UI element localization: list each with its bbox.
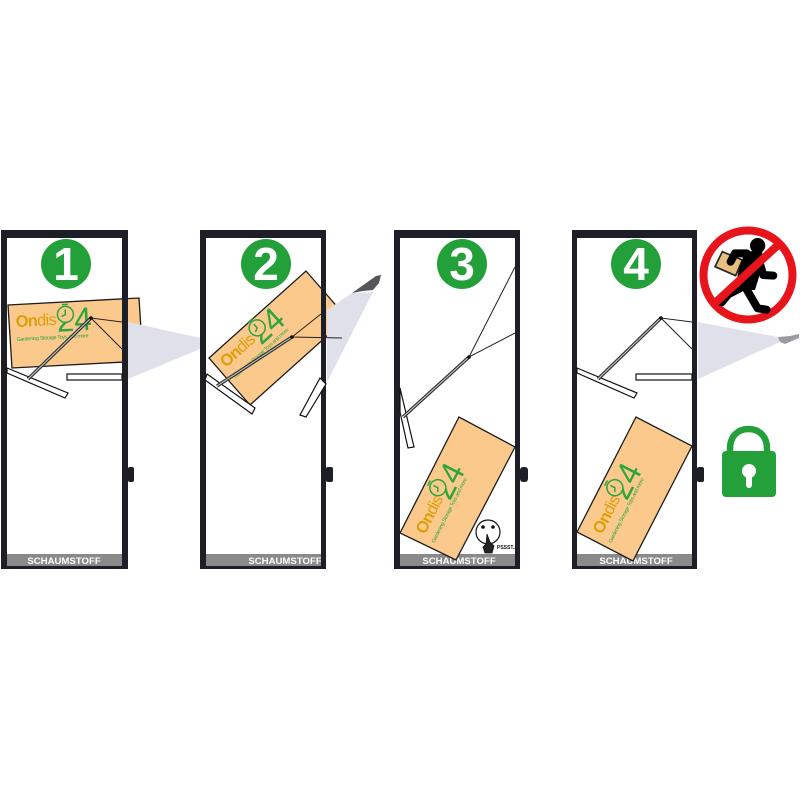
number badge 3 <box>437 238 487 290</box>
parcel 3: Gardening Storage Toys and more <box>431 477 469 544</box>
flap left 3 <box>400 388 414 448</box>
frame 1 <box>1 230 128 569</box>
arm 2 <box>217 314 342 386</box>
number badge 3: 3 <box>449 238 475 290</box>
icon: no parcel theft sign <box>704 230 792 320</box>
icon: shushing face: PSSST... <box>497 545 518 551</box>
shelf 1 <box>128 322 200 379</box>
frame knob 3 <box>520 467 528 482</box>
frame knob 2 <box>326 467 333 482</box>
flap right 1 <box>67 374 122 380</box>
flap left 1 <box>7 368 68 398</box>
flap right 4 <box>636 374 692 380</box>
foam strip 4: SCHAUMSTOFF <box>599 556 673 567</box>
parcel 2: Gardening Storage Toys and more <box>233 327 290 380</box>
frame 2 <box>200 230 326 569</box>
arm 1 <box>28 316 122 379</box>
number badge 4 <box>611 238 661 290</box>
number badge 2: 2 <box>253 238 279 290</box>
parcel 3: 24 <box>423 457 472 505</box>
parcel 1 <box>8 298 143 368</box>
arm 4 <box>598 316 692 379</box>
parcel 4 <box>577 417 692 561</box>
number badge 2 <box>241 238 291 290</box>
number badge 1: 1 <box>53 238 79 290</box>
frame knob 1 <box>128 467 134 482</box>
parcel 1: 24 <box>56 300 93 339</box>
icon: shushing face <box>476 520 518 553</box>
parcel 2 <box>209 271 347 405</box>
frame 3 <box>394 230 520 569</box>
parcel 4: 24 <box>600 457 649 505</box>
icon: padlock <box>722 429 776 497</box>
parcel 1: Gardening Storage Toys and more <box>17 333 89 343</box>
number badge 4: 4 <box>623 238 649 290</box>
foam strip 2 <box>206 554 322 567</box>
parcel 3: Ondis <box>413 492 447 537</box>
shelf 2 <box>327 275 381 382</box>
foam strip 1: SCHAUMSTOFF <box>27 556 101 567</box>
panel: step 2 <box>200 230 381 569</box>
flap left 2 <box>205 374 255 414</box>
number badge 1 <box>41 238 91 290</box>
panel: step 3 <box>394 230 528 569</box>
parcel 4: Gardening Storage Toys and more <box>608 477 646 544</box>
foam strip 1 <box>7 554 122 567</box>
parcel 3 <box>400 417 515 560</box>
parcel 4: Ondis <box>590 492 624 537</box>
foam strip 3: SCHAUMSTOFF <box>422 556 496 567</box>
arm 3 <box>403 267 515 417</box>
panel: step 4 <box>572 230 799 569</box>
flap left 4 <box>577 368 637 398</box>
frame 4 <box>572 230 697 569</box>
parcel 2: Ondis <box>217 330 259 371</box>
foam strip 4 <box>577 554 692 567</box>
frame knob 4 <box>697 467 704 482</box>
parcel 2: 24 <box>241 300 292 351</box>
foam strip 2: SCHAUMSTOFF <box>248 556 322 567</box>
foam strip 3 <box>400 554 515 567</box>
panel: step 1 <box>1 230 200 569</box>
parcel 1: Ondis <box>15 311 57 331</box>
flap right 2 <box>300 378 326 417</box>
shelf 4 <box>698 322 799 379</box>
